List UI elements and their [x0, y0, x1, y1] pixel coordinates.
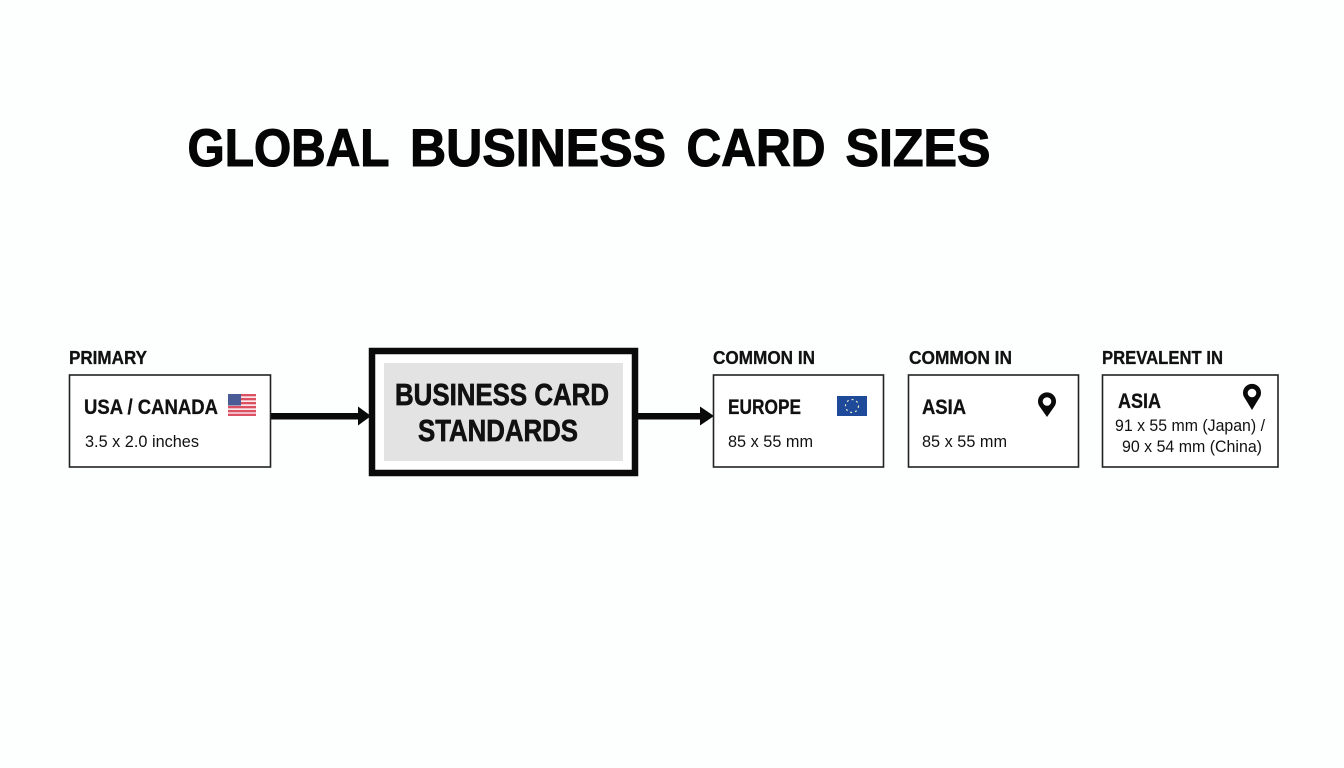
- label: primary: PRIMARY: [69, 348, 147, 368]
- size line 1: 91 x 55 mm (Japan) /: [1115, 417, 1265, 435]
- card box: [714, 375, 884, 467]
- card size: 85 x 55 mm: [728, 433, 813, 451]
- title: BUSINESS: [410, 119, 666, 178]
- size line 2: 90 x 54 mm (China): [1122, 438, 1262, 456]
- label: common in: COMMON IN: [909, 348, 1012, 368]
- card size: 85 x 55 mm: [922, 433, 1007, 451]
- card box: [908, 375, 1078, 467]
- card size: 3.5 x 2.0 inches: [85, 433, 199, 451]
- heading line 2: STANDARDS: [418, 413, 578, 448]
- label: common in: COMMON IN: [713, 348, 815, 368]
- title: CARD: [686, 119, 826, 178]
- panel: USA / Canada: [69, 348, 270, 467]
- card heading: USA / CANADA: [84, 396, 218, 419]
- card heading: EUROPE: [728, 396, 801, 419]
- icon: US flag: [228, 394, 256, 416]
- label: prevalent in: PREVALENT IN: [1102, 348, 1223, 368]
- icon: map pin: [1038, 392, 1056, 417]
- heading line 1: BUSINESS CARD: [395, 377, 609, 412]
- arrow: standards to Europe: [638, 406, 714, 426]
- panel: Asia prevalent: [1102, 348, 1278, 467]
- title: SIZES: [846, 119, 990, 178]
- panel: business card standards: [372, 351, 635, 473]
- card box: [70, 375, 270, 467]
- arrow: USA / Canada to standards: [271, 406, 371, 426]
- icon: map pin: [1243, 384, 1261, 410]
- card box: [1102, 375, 1278, 467]
- panel: Europe: [713, 348, 884, 467]
- card heading: ASIA: [922, 396, 966, 419]
- panel: Asia common: [908, 348, 1078, 467]
- icon: EU flag: [837, 396, 867, 416]
- outer frame: [372, 351, 635, 473]
- card heading: ASIA: [1118, 390, 1161, 413]
- title: [188, 119, 990, 178]
- gray inner panel: [384, 363, 623, 461]
- title: GLOBAL: [188, 119, 390, 178]
